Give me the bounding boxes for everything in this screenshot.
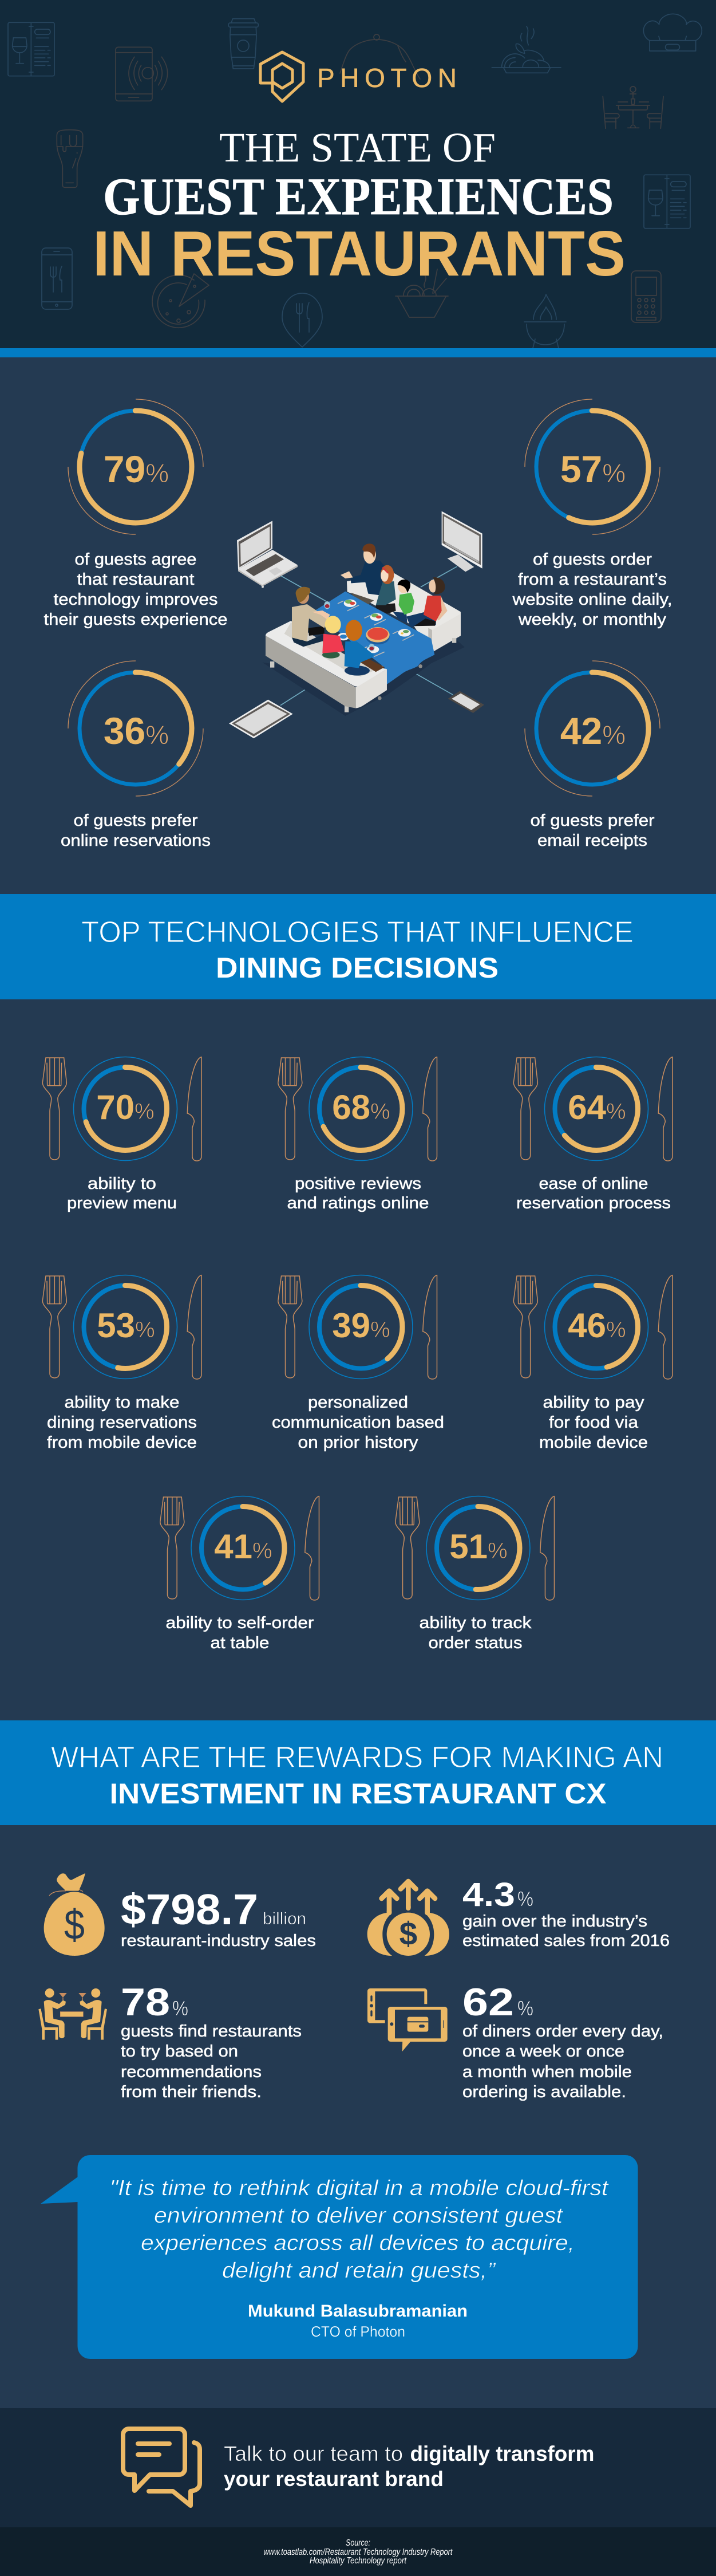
reward: 62%: %: [517, 1996, 533, 2020]
plate: 64% online reservation: ease of online: [539, 1175, 648, 1193]
device: laptop: [237, 521, 298, 588]
stat: 36%: 36%: [104, 710, 169, 752]
stat: 79%: that restaurant: [77, 570, 195, 589]
reward: 78%: 78: [121, 1980, 170, 2024]
reward: 4.3%: estimated sales from 2016: [462, 1932, 670, 1950]
reward: $798.7 billion: billion: [263, 1909, 306, 1928]
plate: 41% self-order: 41%: [214, 1527, 272, 1566]
callout: CTO quote: Mukund Balasubramanian: [248, 2302, 468, 2321]
stat: 57%: [512, 399, 672, 629]
stat: 42%: 42%: [560, 710, 626, 752]
icon: Photon hexagon mark: [260, 52, 303, 101]
callout: CTO quote: "It is time to rethink digital in a mobile cloud-first: [110, 2176, 609, 2200]
reward: 78%: [38, 1980, 302, 2101]
plate: 64% online reservation: 64%: [568, 1088, 626, 1126]
device: desktop monitor: [442, 511, 482, 572]
plate: 64% online reservation: reservation process: [516, 1194, 671, 1212]
callout: CTO quote: environment to deliver consistent guest: [154, 2204, 564, 2228]
call to action text: your restaurant brand: [224, 2467, 444, 2491]
reward: $798.7 billion: [44, 1873, 316, 1956]
plate: 51% track order: 51%: [449, 1527, 508, 1566]
reward: 78%: from their friends.: [121, 2083, 262, 2101]
icon: coin with rising arrows: [367, 1881, 449, 1956]
reward: 62%: [367, 1980, 663, 2101]
title: GUEST EXPERIENCES: [103, 167, 614, 226]
panel: sources footer: www.toastlab.com/Restaurant Technology Industry Report: [263, 2547, 453, 2557]
stat: 57%: 57%: [560, 448, 626, 490]
panel: call to action: [0, 2408, 716, 2527]
background icons: header pattern: [8, 14, 702, 348]
plate: 68% reviews: and ratings online: [287, 1194, 429, 1212]
plate: 51% track order: ability to track: [419, 1614, 532, 1632]
callout: CTO quote: delight and retain guests,”: [222, 2259, 497, 2283]
stat: 57%: from a restaurant’s: [518, 570, 667, 589]
plate: 70% preview menu: ability to: [88, 1175, 156, 1193]
plate: 46% mobile pay: [513, 1275, 673, 1452]
stat: 79%: of guests agree: [74, 550, 197, 569]
icon: money bag: $: [64, 1901, 85, 1948]
reward: 4.3%: %: [517, 1887, 533, 1911]
logo wordmark: PHOTON: [317, 63, 457, 93]
plate: 51% track order: [395, 1496, 554, 1652]
reward: 78%: recommendations: [121, 2063, 262, 2081]
stat: 36%: [61, 661, 211, 850]
title: [93, 124, 626, 289]
plate: 51% track order: order status: [428, 1634, 522, 1652]
food on table: [338, 600, 414, 657]
banner: top technologies: DINING DECISIONS: [216, 952, 499, 984]
reward: 62%: ordering is available.: [462, 2083, 626, 2101]
person: boy in green: [393, 580, 414, 623]
reward: 62%: once a week or once: [462, 2042, 624, 2061]
reward: 4.3%: gain over the industry’s: [462, 1912, 647, 1931]
near sofa: [266, 621, 387, 712]
panel: body background: [0, 357, 716, 2408]
plate: 68% reviews: positive reviews: [295, 1175, 421, 1193]
panel: header: [0, 0, 716, 348]
plate: 53% mobile reservations: ability to make: [64, 1393, 180, 1412]
stat: 42%: email receipts: [537, 832, 647, 850]
icon: money bag: [44, 1873, 105, 1956]
reward: 78%: to try based on: [121, 2042, 238, 2061]
plate: 41% self-order: at table: [211, 1634, 269, 1652]
stat: 79%: 79%: [104, 448, 169, 490]
stat: 79%: [43, 399, 228, 629]
plate: 53% mobile reservations: dining reservations: [47, 1413, 197, 1432]
banner: top technologies: [0, 894, 716, 999]
plate: 70% preview menu: 70%: [96, 1088, 155, 1126]
plate: 39% personalized communication: on prior history: [298, 1433, 418, 1452]
plate: 53% mobile reservations: [42, 1275, 201, 1452]
plate: 53% mobile reservations: from mobile device: [47, 1433, 197, 1452]
divider bar: [0, 348, 716, 357]
person: man at back: [341, 543, 385, 604]
reward: 62%: 62: [462, 1980, 514, 2024]
stat: 36%: online reservations: [61, 832, 211, 850]
icon: mobile devices with card: [367, 1988, 448, 2051]
call to action text: [224, 2442, 594, 2491]
reward: 62%: a month when mobile: [462, 2063, 632, 2081]
title: IN RESTAURANTS: [93, 218, 626, 289]
stat: 36%: of guests prefer: [73, 812, 198, 830]
call to action text: digitally transform: [410, 2442, 594, 2465]
tablecloth: [313, 592, 434, 684]
icon: two people toasting at table: [38, 1988, 107, 2040]
plate: 70% preview menu: [42, 1057, 201, 1212]
person: blonde child: [322, 616, 345, 659]
device: tablet: [229, 700, 293, 738]
plate: 39% personalized communication: personalized: [308, 1393, 408, 1412]
callout: CTO quote: [41, 2155, 638, 2359]
banner: top technologies: TOP TECHNOLOGIES THAT INFLUENCE: [81, 916, 634, 949]
person: man in beige sweater: [292, 587, 330, 647]
icon: chat bubbles: [123, 2429, 200, 2506]
person: woman in red: [406, 577, 448, 628]
plate: 39% personalized communication: 39%: [332, 1306, 390, 1345]
illustration: family at restaurant table with connected devices: [229, 511, 484, 738]
plate: 39% personalized communication: [272, 1275, 444, 1452]
plate: 68% reviews: 68%: [332, 1088, 390, 1126]
reward: 78%: %: [172, 1996, 188, 2020]
callout: CTO quote: CTO of Photon: [311, 2323, 405, 2340]
plate: 70% preview menu: preview menu: [67, 1194, 177, 1212]
stat: 57%: website online daily,: [512, 590, 672, 609]
reward: 4.3%: [367, 1876, 670, 1956]
title: THE STATE OF: [219, 124, 496, 171]
plate: 46% mobile pay: 46%: [568, 1306, 626, 1345]
reward: 4.3%: 4.3: [462, 1876, 515, 1913]
reward: $798.7 billion: $798.7: [121, 1885, 258, 1933]
panel: sources footer: Hospitality Technology report: [310, 2556, 406, 2566]
plate: 41% self-order: ability to self-order: [166, 1614, 314, 1632]
reward: $798.7 billion: restaurant-industry sales: [121, 1932, 316, 1950]
icon: coin with rising arrows: $: [399, 1916, 417, 1952]
plate: 46% mobile pay: ability to pay: [543, 1393, 644, 1412]
callout: CTO quote: experiences across all devices to acquire,: [141, 2231, 575, 2255]
banner: rewards: WHAT ARE THE REWARDS FOR MAKING AN: [51, 1741, 663, 1774]
far sofa: [347, 573, 461, 668]
banner: rewards: [0, 1720, 716, 1825]
person: woman with auburn hair: [345, 620, 375, 676]
stat: 42%: [525, 661, 660, 850]
plate: 68% reviews: [278, 1057, 437, 1212]
stat: 57%: of guests order: [533, 550, 652, 569]
stat: 79%: their guests experience: [43, 610, 228, 629]
panel: sources footer: Source:: [346, 2538, 370, 2548]
stat: 79%: technology improves: [54, 590, 217, 609]
plate: 64% online reservation: [513, 1057, 673, 1212]
reward: 78%: guests find restaurants: [121, 2022, 302, 2041]
plate: 41% self-order: [160, 1496, 319, 1652]
plate: 53% mobile reservations: 53%: [97, 1306, 155, 1345]
panel: sources footer: [0, 2527, 716, 2576]
logo: Photon: [260, 52, 457, 101]
plate: 46% mobile pay: for food via: [549, 1413, 639, 1432]
reward: 62%: of diners order every day,: [462, 2022, 663, 2041]
stat: 57%: weekly, or monthly: [518, 610, 667, 629]
person: girl with red headband: [376, 565, 396, 614]
stat: 42%: of guests prefer: [530, 812, 655, 830]
banner: rewards: INVESTMENT IN RESTAURANT CX: [110, 1778, 607, 1810]
call to action text: Talk to our team to: [224, 2442, 403, 2465]
plate: 39% personalized communication: communication based: [272, 1413, 444, 1432]
device: phone: [448, 691, 484, 713]
plate: 46% mobile pay: mobile device: [539, 1433, 648, 1452]
